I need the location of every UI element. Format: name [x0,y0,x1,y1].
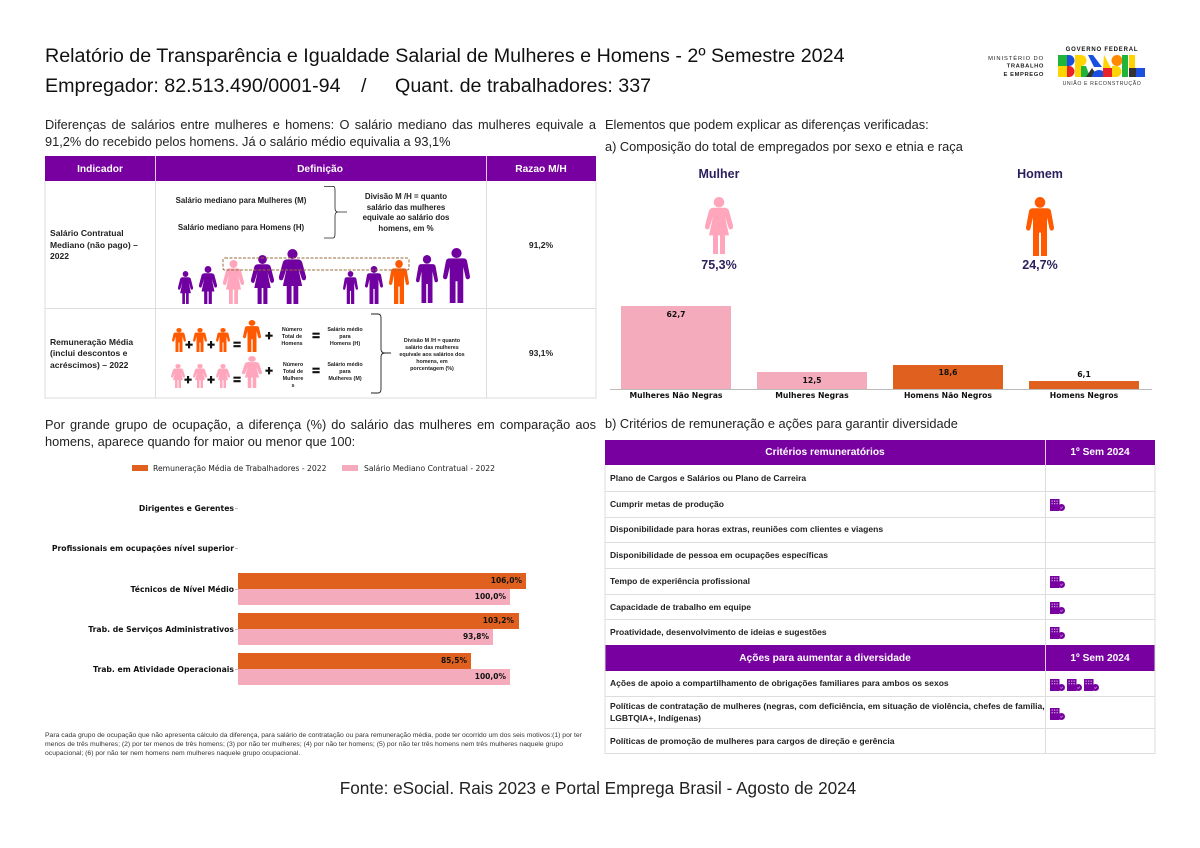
table: critérios remuneratórios e ações: Políticas de contratação de mulheres (negras, com deficiência, em situação de violência, chefes de família, [610,701,1045,711]
logo: ministério e governo federal: MINISTÉRIO DO [988,55,1044,62]
formula: remuneração média homens: Salário médio [327,327,363,333]
definition text: salário mediano: Salário mediano para Homens (H) [178,223,305,232]
bar chart: composição por sexo e raça: 18,6 [939,368,957,377]
definition text: divisão M/H: salário das mulheres [405,345,459,351]
footnote: menos de três mulheres; (2) por ter menos de três homens; (3) por não ter mulheres; (4) por não ter homens; (5) por não ter três homens nem três mulheres naquele grupo [45,741,563,748]
formula: remuneração média homens: = [233,337,241,352]
row label: remuneração média: acréscimos) – 2022 [50,360,129,370]
formula: remuneração média homens: + [207,337,215,352]
formula: remuneração média homens [172,320,363,352]
formula: remuneração média homens: para [339,334,352,340]
definition text: divisão M/H: Divisão M /H = quanto [404,338,461,344]
icon group: homem 24,7%: 24,7% [1022,258,1058,272]
formula: remuneração média mulheres: Número [283,362,304,368]
value: 91,2%: 91,2% [529,240,554,250]
row label: salário contratual: Salário Contratual [50,228,124,238]
formula: remuneração média mulheres: = [233,372,241,387]
heading: composição [605,117,964,154]
bar chart: diferença por grupo de ocupação: Trab. de Serviços Administrativos [88,625,234,634]
row label: salário contratual [50,228,138,261]
formula: remuneração média homens: Homens [281,341,303,347]
formula: remuneração média mulheres: = [312,363,320,378]
bar chart: diferença por grupo de ocupação: 100,0% [475,672,506,681]
heading: composição: a) Composição do total de empregados por sexo e etnia e raça [605,139,964,154]
formula: remuneração média mulheres [171,356,363,389]
table: critérios remuneratórios e ações: 1º Sem 2024 [1070,447,1130,458]
logo: ministério e governo federal: TRABALHO [1007,64,1044,70]
value: 93,1%: 93,1% [529,348,554,358]
table: critérios remuneratórios e ações: Disponibilidade para horas extras, reuniões com clientes e viagens [610,524,883,534]
table: critérios remuneratórios e ações: Ações para aumentar a diversidade [739,653,911,664]
formula: remuneração média mulheres: Mulheres (M) [328,376,362,382]
logo: ministério e governo federal: GOVERNO FEDERAL [1066,47,1138,53]
bar chart: composição por sexo e raça: Homens Não Negros [904,391,992,400]
formula: remuneração média mulheres: + [184,372,192,387]
table: critérios remuneratórios e ações: Cumprir metas de produção [610,499,724,509]
title: Empregador: 82.513.490/0001-94 [45,75,341,97]
bar chart: composição por sexo e raça: 6,1 [1077,370,1091,379]
footnote: ocupacional; (6) por não ter nem homens nem mulheres naquele grupo ocupacional. [45,750,300,757]
legend [132,464,495,473]
bar chart: composição por sexo e raça: 62,7 [667,310,685,319]
formula: remuneração média homens: + [185,337,193,352]
bar chart: diferença por grupo de ocupação: 106,0% [491,576,522,585]
logo: ministério e governo federal: UNIÃO E RECONSTRUÇÃO [1063,80,1141,87]
heading: composição: Elementos que podem explicar as diferenças verificadas: [605,117,929,132]
icon group: mulher 75,3% [699,167,740,272]
formula: remuneração média mulheres: Total de [283,369,303,375]
legend: Salário Mediano Contratual - 2022 [364,464,495,473]
definition text: salário mediano [176,186,450,238]
title [45,45,845,97]
definition text: salário mediano: homens, em % [378,224,434,233]
definition text: salário mediano: Salário mediano para Mulheres (M) [176,196,307,205]
formula: remuneração média mulheres: + [265,363,273,378]
bar chart: composição por sexo e raça: Mulheres Negras [775,391,849,400]
row label: salário contratual: 2022 [50,251,69,261]
bar chart: diferença por grupo de ocupação: Dirigentes e Gerentes [139,504,234,513]
table: indicadores salariais: Definição [297,164,343,175]
icon group: mulher 75,3%: Mulher [699,167,740,181]
bar chart: diferença por grupo de ocupação [52,504,526,685]
bar chart: composição por sexo e raça: 12,5 [803,376,821,385]
table: indicadores salariais: Razao M/H [515,164,567,175]
table: critérios remuneratórios e ações: Plano de Cargos e Salários ou Plano de Carreira [610,473,806,483]
formula: remuneração média homens: Número [282,327,303,333]
row label: remuneração média: (inclui descontos e [50,348,128,358]
table: critérios remuneratórios e ações: 1º Sem 2024 [1070,653,1130,664]
formula: remuneração média homens: = [312,328,320,343]
bar chart: diferença por grupo de ocupação: 103,2% [483,616,514,625]
table: critérios remuneratórios e ações: Políticas de promoção de mulheres para cargos de direção e gerência [610,736,895,746]
title: / [361,75,367,97]
table: critérios remuneratórios e ações: Tempo de experiência profissional [610,576,750,586]
definition text: divisão M/H: equivale aos salários dos [399,352,465,358]
bar chart: diferença por grupo de ocupação: Profissionais em ocupações nível superior [52,544,234,553]
bar chart: diferença por grupo de ocupação: Técnicos de Nível Médio [131,585,234,594]
formula: remuneração média mulheres: + [207,372,215,387]
heading: critérios: b) Critérios de remuneração e ações para garantir diversidade [605,416,958,431]
source: Fonte: eSocial. Rais 2023 e Portal Emprega Brasil - Agosto de 2024 [340,778,857,798]
table: critérios remuneratórios e ações: Proatividade, desenvolvimento de ideias e sugestões [610,627,827,637]
formula: remuneração média homens: + [265,328,273,343]
icon group: mulher 75,3%: 75,3% [701,258,737,272]
bar chart: composição por sexo e raça: Mulheres Não Negras [630,391,723,400]
footnote: Para cada grupo de ocupação que não apresenta cálculo da diferença, para salário de contratação ou para remuneração média, pode ter ocorrido um dos seis motivos:(1) por ter [45,732,583,739]
formula: remuneração média mulheres: Salário médio [327,362,363,368]
definition text: divisão M/H: homens, em [416,359,448,365]
formula: remuneração média homens: Total de [282,334,302,340]
bar chart: composição por sexo e raça [610,306,1152,400]
definition text: divisão M/H: porcentagem (%) [410,366,454,372]
title: Quant. de trabalhadores: 337 [395,75,651,97]
bar chart: diferença por grupo de ocupação: 100,0% [475,592,506,601]
table: critérios remuneratórios e ações: Critérios remuneratórios [765,447,885,458]
icons: pessoas ordenadas por salário [178,248,470,304]
table: critérios remuneratórios e ações: Capacidade de trabalho em equipe [610,602,751,612]
legend: Remuneração Média de Trabalhadores - 2022 [153,464,327,473]
row label: salário contratual: Mediano (não pago) – [50,240,138,250]
definition text: salário mediano: salário das mulheres [367,203,446,212]
table: critérios remuneratórios e ações [605,440,1155,754]
table: critérios remuneratórios e ações: LGBTQIA+, Indígenas) [610,713,701,723]
bar chart: diferença por grupo de ocupação: 93,8% [463,632,489,641]
definition text: salário mediano: Divisão M /H = quanto [365,192,447,201]
logo: ministério e governo federal [988,47,1145,87]
definition text: salário mediano: equivale ao salário dos [363,213,450,222]
row label: remuneração média: Remuneração Média [50,337,133,347]
logo: ministério e governo federal: E EMPREGO [1003,72,1044,78]
bar chart: composição por sexo e raça: Homens Negros [1050,391,1119,400]
text block: grupo de ocupação: Por grande grupo de ocupação, a diferença (%) do salário das mulheres em comparação aos homens, aparece quando for maior ou menor que 100: [45,417,596,449]
table: critérios remuneratórios e ações: Disponibilidade de pessoa em ocupações específicas [610,550,828,560]
icon group: homem 24,7%: Homem [1017,167,1063,181]
icon group: homem 24,7% [1017,167,1063,272]
formula: remuneração média mulheres: s [292,383,294,389]
table: critérios remuneratórios e ações: Ações de apoio a compartilhamento de obrigações familiares para ambos os sexos [610,678,949,688]
footnote [45,732,583,757]
row label: remuneração média [50,337,133,370]
formula: remuneração média homens: Homens (H) [330,341,360,347]
definition text: divisão M/H [371,314,465,393]
title: Relatório de Transparência e Igualdade Salarial de Mulheres e Homens - 2º Semestre 2024 [45,45,845,67]
bar chart: diferença por grupo de ocupação: Trab. em Atividade Operacionais [93,665,234,674]
formula: remuneração média mulheres: Mulhere [283,376,303,382]
table: indicadores salariais: Indicador [77,164,123,175]
formula: remuneração média mulheres: para [339,369,352,375]
bar chart: diferença por grupo de ocupação: 85,5% [441,656,467,665]
text block: diferenças de salários: Diferenças de salários entre mulheres e homens: O salário mediano das mulheres equivale a 91,2% do recebido pelos homens. Já o salário médio equivalia a 93,1% [45,117,596,149]
table: indicadores salariais [45,156,596,398]
